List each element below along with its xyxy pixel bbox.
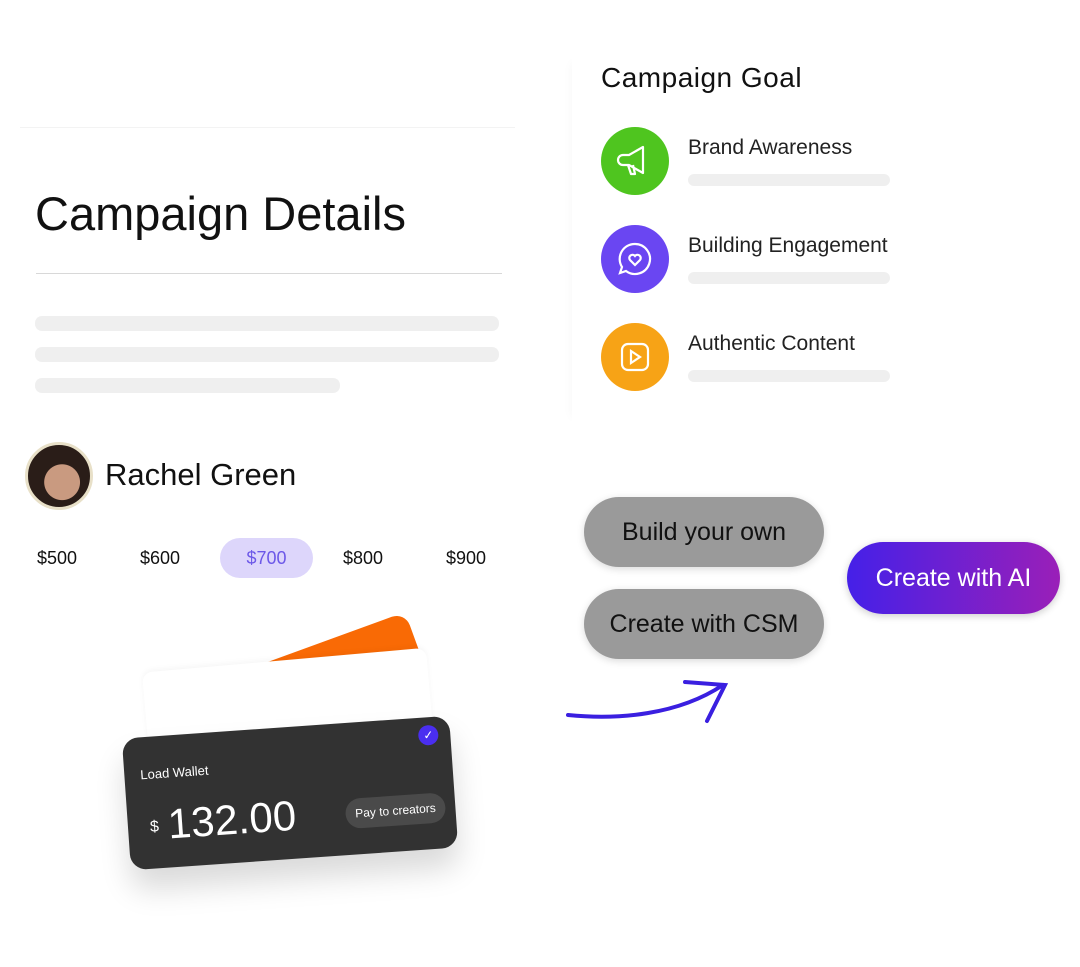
card: load wallet: Load Wallet xyxy=(140,763,209,782)
button: create with csm: Create with CSM xyxy=(610,610,798,638)
wallet cards xyxy=(115,616,468,898)
icon: check badge xyxy=(418,725,439,746)
card: load wallet: Pay to creators xyxy=(355,801,436,820)
profile: rachel green xyxy=(25,442,296,510)
selected price xyxy=(220,538,313,578)
button: build your own: Build your own xyxy=(622,518,786,546)
heading: campaign details: Campaign Details xyxy=(35,187,406,240)
icon: megaphone xyxy=(601,127,669,195)
price options: $800 xyxy=(343,548,383,568)
price options: $600 xyxy=(140,548,180,568)
goal: authentic content xyxy=(601,323,890,391)
arrow xyxy=(566,680,728,724)
goal: brand awareness xyxy=(601,127,890,195)
panel: campaign details xyxy=(20,127,515,408)
button: create with csm xyxy=(584,589,824,659)
goal: building engagement: Building Engagement xyxy=(688,234,888,257)
card: load wallet: $ xyxy=(149,818,160,836)
goal: authentic content: Authentic Content xyxy=(688,332,855,355)
panel: campaign goal xyxy=(572,55,952,425)
profile: rachel green: Rachel Green xyxy=(105,457,296,492)
text placeholder bars xyxy=(35,316,499,393)
card: load wallet xyxy=(122,716,458,870)
icon: video xyxy=(601,323,669,391)
button: create with ai: Create with AI xyxy=(876,564,1031,592)
price options: $500 xyxy=(37,548,77,568)
card: load wallet: 132.00 xyxy=(166,792,298,848)
icon: chat heart xyxy=(601,225,669,293)
selected price: $700 xyxy=(246,548,287,568)
goal: building engagement xyxy=(601,225,890,293)
price options: $900 xyxy=(446,548,486,568)
price options xyxy=(37,538,486,578)
button: build your own xyxy=(584,497,824,567)
goal: brand awareness: Brand Awareness xyxy=(688,136,852,159)
avatar xyxy=(25,442,93,510)
button: create with ai xyxy=(847,542,1060,614)
heading: campaign goal: Campaign Goal xyxy=(601,62,802,93)
icon: check badge: ✓ xyxy=(423,728,434,743)
